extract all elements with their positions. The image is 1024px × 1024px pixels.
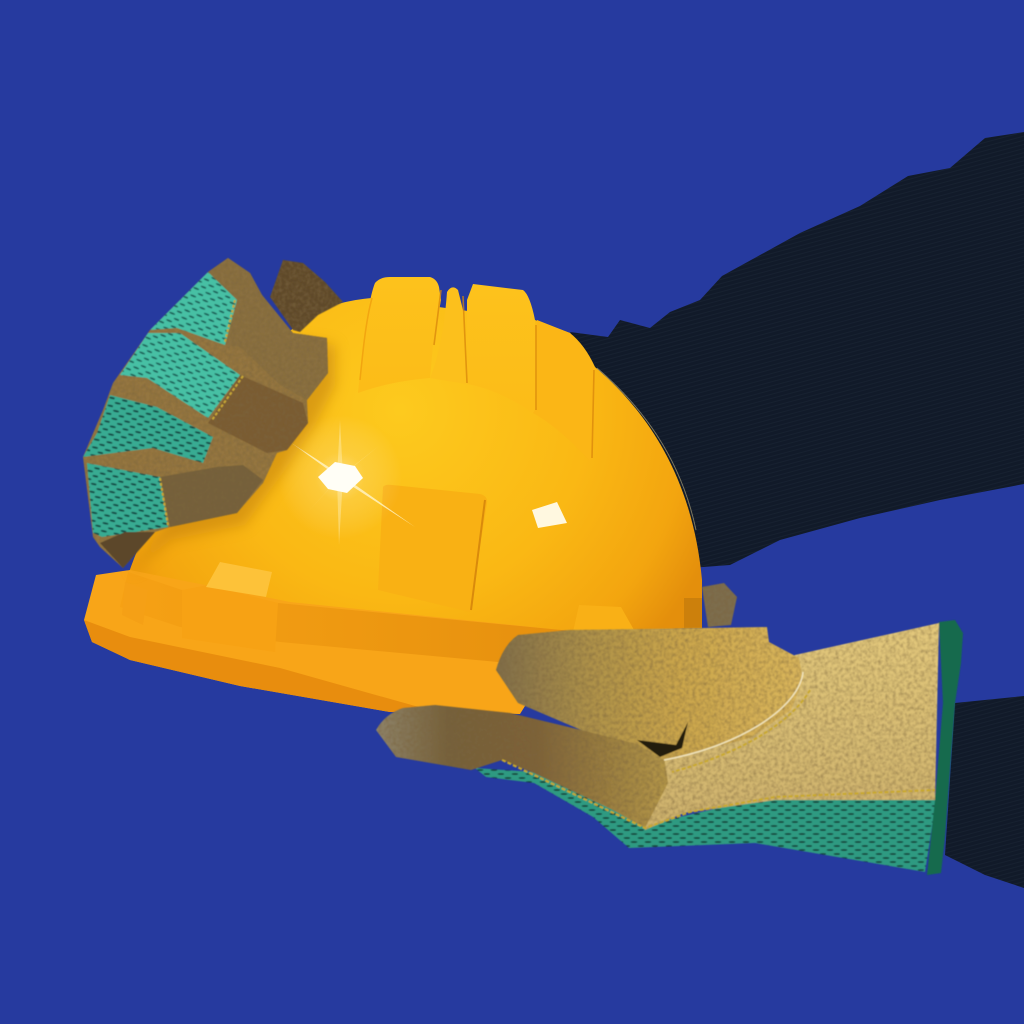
right glove white seam: [664, 672, 803, 760]
hard hat: [84, 277, 702, 714]
left glove shadow on hat: [130, 340, 335, 575]
left glove mesh two: [120, 333, 240, 418]
right glove lower finger: [376, 705, 668, 828]
hat clip top: [206, 562, 272, 597]
hat right clip: [573, 605, 634, 632]
right glove fold shadow: [637, 722, 688, 757]
hat dome: [128, 298, 702, 632]
left glove mesh four: [87, 463, 168, 537]
sleeve: upper dark arm: [570, 132, 1024, 568]
left glove mesh three: [83, 395, 213, 463]
left glove stitching: [160, 300, 243, 525]
left glove knuckle one: [208, 258, 328, 400]
right glove cuff leather: [640, 623, 939, 830]
left glove nub: [100, 532, 155, 568]
left glove mesh one: [150, 272, 237, 345]
hat brim: [84, 570, 572, 714]
left glove knuckle two: [208, 375, 308, 453]
hat front tab: [378, 485, 487, 612]
sleeve: lower dark cuff: [945, 696, 1024, 888]
right glove mesh underside: [475, 768, 937, 872]
left glove: [83, 258, 343, 568]
hat brim lower edge: [84, 620, 440, 713]
hat side clip: [182, 585, 278, 652]
hat left ribs: [122, 582, 148, 625]
left glove base: [83, 258, 328, 568]
hat rim light: [597, 368, 696, 530]
right glove stitching: [502, 690, 935, 828]
right glove back finger: [702, 583, 737, 627]
right glove: [376, 583, 963, 875]
left glove lower finger: [160, 465, 263, 527]
hat tab edge: [471, 500, 485, 610]
hat ridges: [358, 277, 595, 461]
hat highlight right: [532, 502, 567, 528]
hat edge shadow: [684, 598, 702, 630]
hat sparkle: [278, 415, 415, 545]
right glove green cuff binding: [927, 620, 963, 875]
left glove thumb: [270, 260, 343, 332]
right glove thumb: [496, 627, 803, 760]
hat brim band: [120, 572, 572, 662]
